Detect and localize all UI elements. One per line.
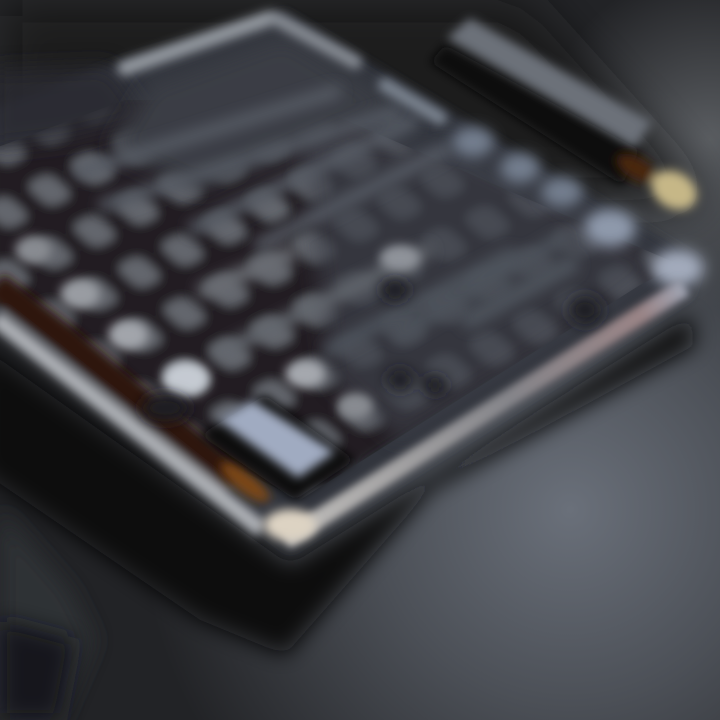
dark key wells: [141, 280, 602, 422]
front left frame edge: [0, 285, 262, 530]
right key area tint: [300, 130, 670, 440]
front right frame edge: [285, 287, 685, 540]
bright keys: [15, 236, 420, 419]
dark upper left casing: [0, 65, 150, 150]
upper key area tint: [110, 35, 400, 190]
key grid: [0, 100, 680, 500]
pen on desk: [430, 18, 704, 218]
space key: [200, 395, 355, 500]
pen barrel: [447, 18, 652, 148]
right edge key blobs: [452, 127, 704, 287]
pen shadow: [430, 45, 640, 185]
pen tip: [611, 147, 704, 218]
corner highlight: [215, 456, 316, 541]
long key row bands: [80, 92, 570, 352]
keyboard shadow: [0, 315, 695, 655]
keyboard top frame: [125, 18, 440, 118]
keyboard body: [0, 12, 704, 550]
